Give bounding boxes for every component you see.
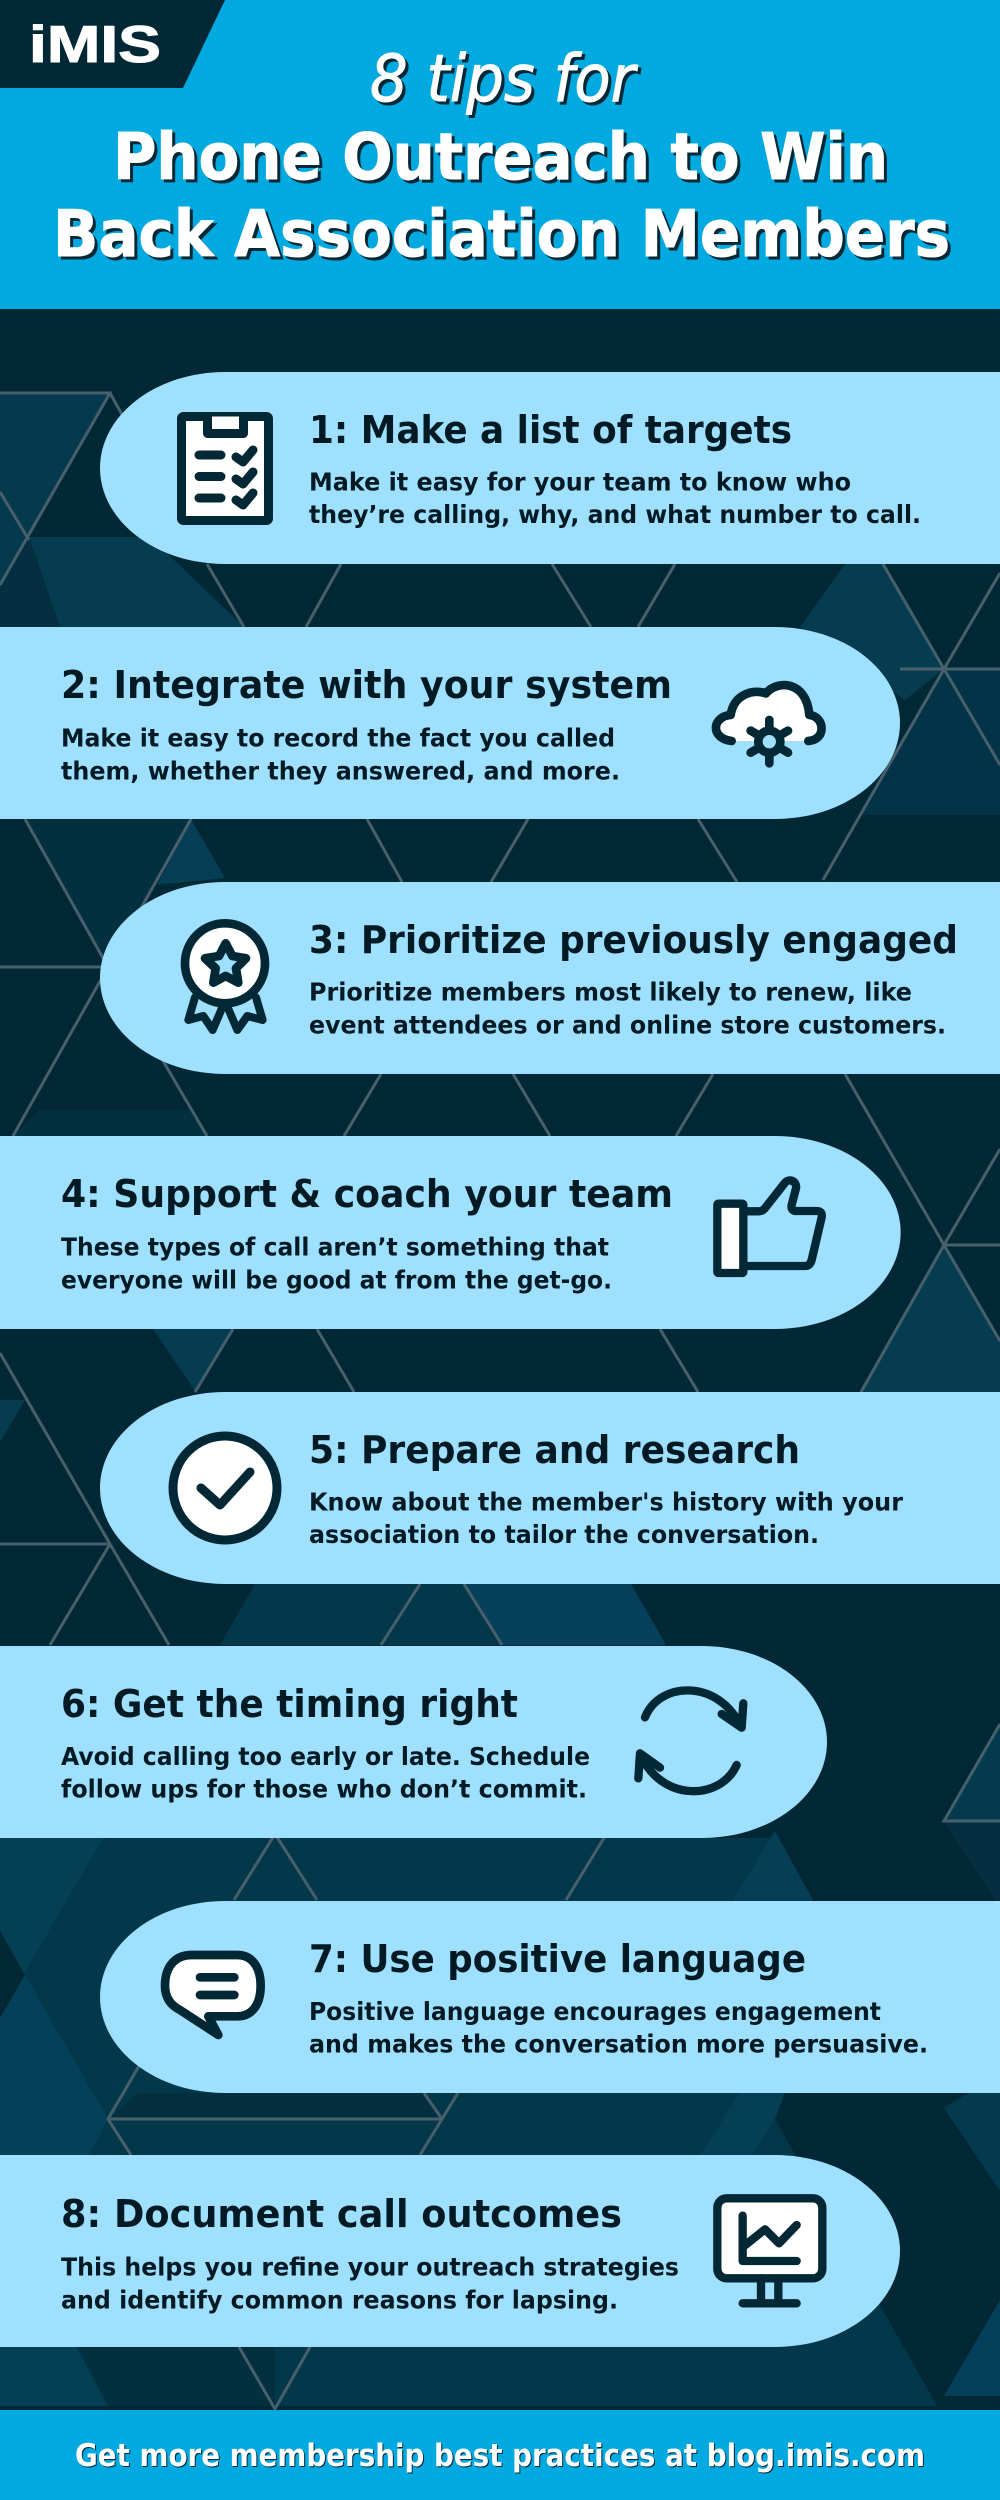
- title: [53, 42, 950, 272]
- icon: refresh arrows: [638, 1690, 743, 1791]
- text: tip 4 body: These types of call aren’t something that: [61, 1232, 609, 1262]
- text: tip 4 body: [61, 1232, 612, 1294]
- text: tip 1 body: they’re calling, why, and what number to call.: [309, 500, 921, 529]
- footer call to action: Get more membership best practices at blog.imis.com: [75, 2438, 925, 2474]
- heading: tip 5: 5: Prepare and research: [309, 1428, 800, 1472]
- title: Back Association Members: [53, 198, 950, 272]
- text: tip 7 body: Positive language encourages engagement: [309, 1997, 881, 2026]
- text: tip 4 body: everyone will be good at from the get-go.: [61, 1266, 612, 1294]
- heading: tip 7: 7: Use positive language: [309, 1937, 806, 1981]
- text: tip 2 body: them, whether they answered, and more.: [61, 756, 620, 786]
- text: tip 1 body: Make it easy for your team to know who: [309, 468, 851, 496]
- heading: tip 2: 2: Integrate with your system: [61, 663, 672, 707]
- text: tip 5 body: association to tailor the conversation.: [309, 1520, 819, 1549]
- text: tip 7 body: and makes the conversation more persuasive.: [309, 2030, 928, 2058]
- heading: tip 1: 1: Make a list of targets: [309, 408, 792, 452]
- heading: tip 3: 3: Prioritize previously engaged: [309, 918, 958, 962]
- panel: tip 2: [0, 627, 900, 819]
- icon: cloud with gear: [716, 685, 822, 763]
- icon: check circle: [173, 1436, 277, 1540]
- text: tip 2 body: Make it easy to record the fact you called: [61, 724, 615, 752]
- text: tip 7 body: [309, 1997, 928, 2058]
- panel: tip 5: [100, 1392, 1000, 1584]
- text: tip 2 body: [61, 724, 620, 786]
- heading: tip 6: 6: Get the timing right: [61, 1682, 518, 1726]
- text: tip 6 body: [61, 1742, 590, 1804]
- icon: clipboard checklist: [182, 416, 268, 520]
- footer band: [0, 2410, 1000, 2500]
- heading: tip 8: 8: Document call outcomes: [61, 2192, 622, 2236]
- text: tip 5 body: Know about the member's history with your: [309, 1488, 904, 1516]
- text: tip 6 body: Avoid calling too early or late. Schedule: [61, 1742, 590, 1771]
- title: Phone Outreach to Win: [113, 121, 888, 195]
- text: tip 3 body: Prioritize members most likely to renew, like: [309, 978, 912, 1006]
- text: tip 3 body: event attendees or and online store customers.: [309, 1010, 946, 1040]
- panel: tip 7: [100, 1901, 1000, 2093]
- title: 8 tips for: [370, 42, 639, 117]
- text: tip 5 body: [309, 1488, 904, 1549]
- panel: tip 8: [0, 2155, 900, 2347]
- text: tip 8 body: [61, 2252, 679, 2314]
- text: tip 6 body: follow ups for those who don’t commit.: [61, 1774, 587, 1804]
- logo: iMIS: iMIS: [29, 16, 161, 74]
- panel: tip 4: [0, 1136, 901, 1329]
- icon: speech bubble: [165, 1955, 261, 2035]
- text: tip 1 body: [309, 468, 921, 529]
- text: tip 8 body: This helps you refine your outreach strategies: [61, 2252, 679, 2282]
- icon: thumbs up: [717, 1180, 822, 1273]
- icon: award ribbon: [185, 923, 265, 1030]
- panel: tip 1: [100, 372, 1000, 564]
- logo: iMIS: [0, 0, 225, 88]
- header band: [0, 0, 1000, 309]
- panel: tip 3: [100, 882, 1000, 1074]
- panel: tip 6: [0, 1646, 827, 1838]
- heading: tip 4: 4: Support & coach your team: [61, 1172, 673, 1216]
- text: tip 3 body: [309, 978, 946, 1040]
- icon: monitor with chart: [717, 2198, 822, 2303]
- text: tip 8 body: and identify common reasons for lapsing.: [61, 2286, 618, 2314]
